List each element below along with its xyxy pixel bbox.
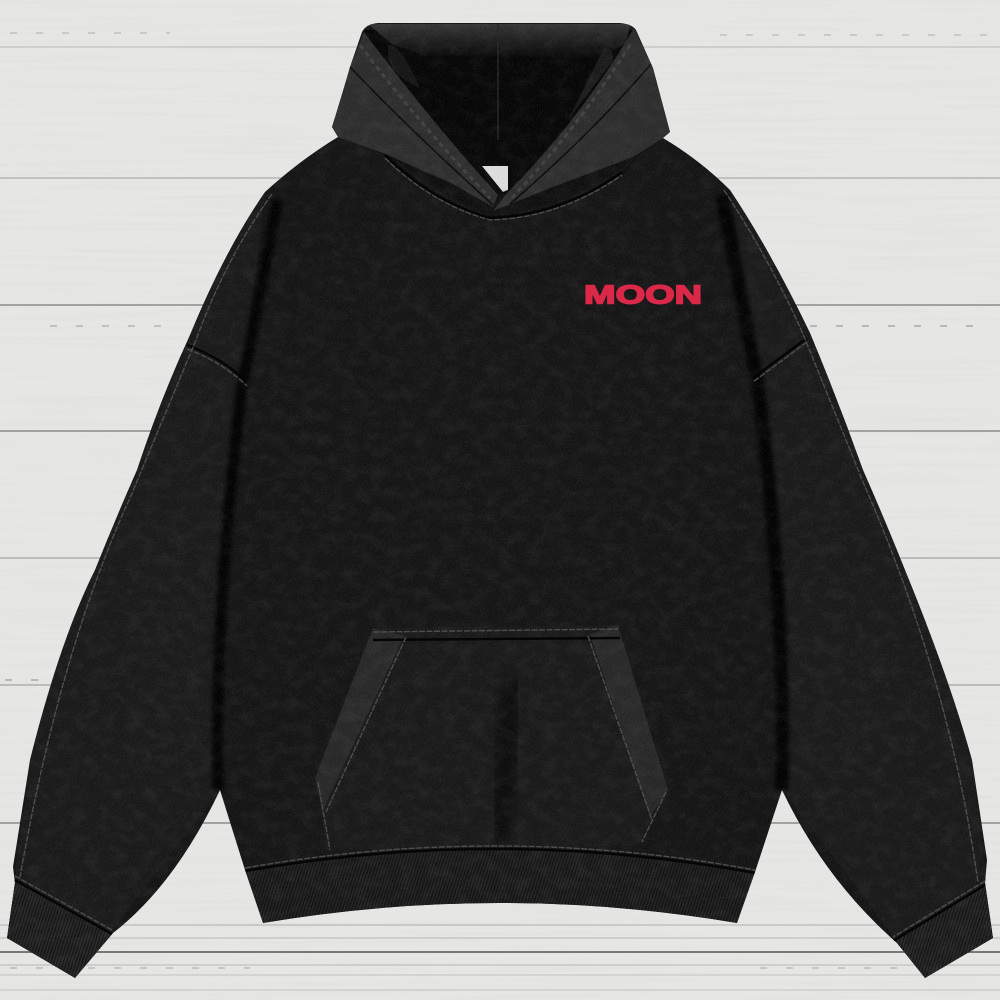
neck label — [482, 166, 508, 192]
flap fold lines — [350, 67, 493, 205]
pocket centre fold — [500, 680, 512, 840]
pocket left opening — [315, 628, 404, 810]
armpit shadows — [218, 200, 278, 790]
left cuff — [7, 878, 113, 978]
centre back seam — [497, 24, 499, 140]
rib texture — [7, 848, 993, 978]
chest logo text: MOON — [584, 282, 702, 310]
hood left flap — [332, 32, 498, 207]
hood interior — [332, 30, 670, 205]
waistband — [245, 848, 755, 923]
light stitching — [15, 158, 985, 937]
pocket — [315, 625, 668, 855]
flap stitching — [360, 45, 630, 198]
right cuff — [893, 883, 993, 978]
solid seams — [15, 155, 985, 941]
sleeves tone — [7, 192, 265, 978]
hood top band — [370, 24, 630, 52]
pocket right opening — [590, 625, 668, 817]
shaded neckline — [392, 156, 636, 216]
hood right flap — [493, 28, 670, 211]
inner hood tabs — [388, 45, 420, 88]
